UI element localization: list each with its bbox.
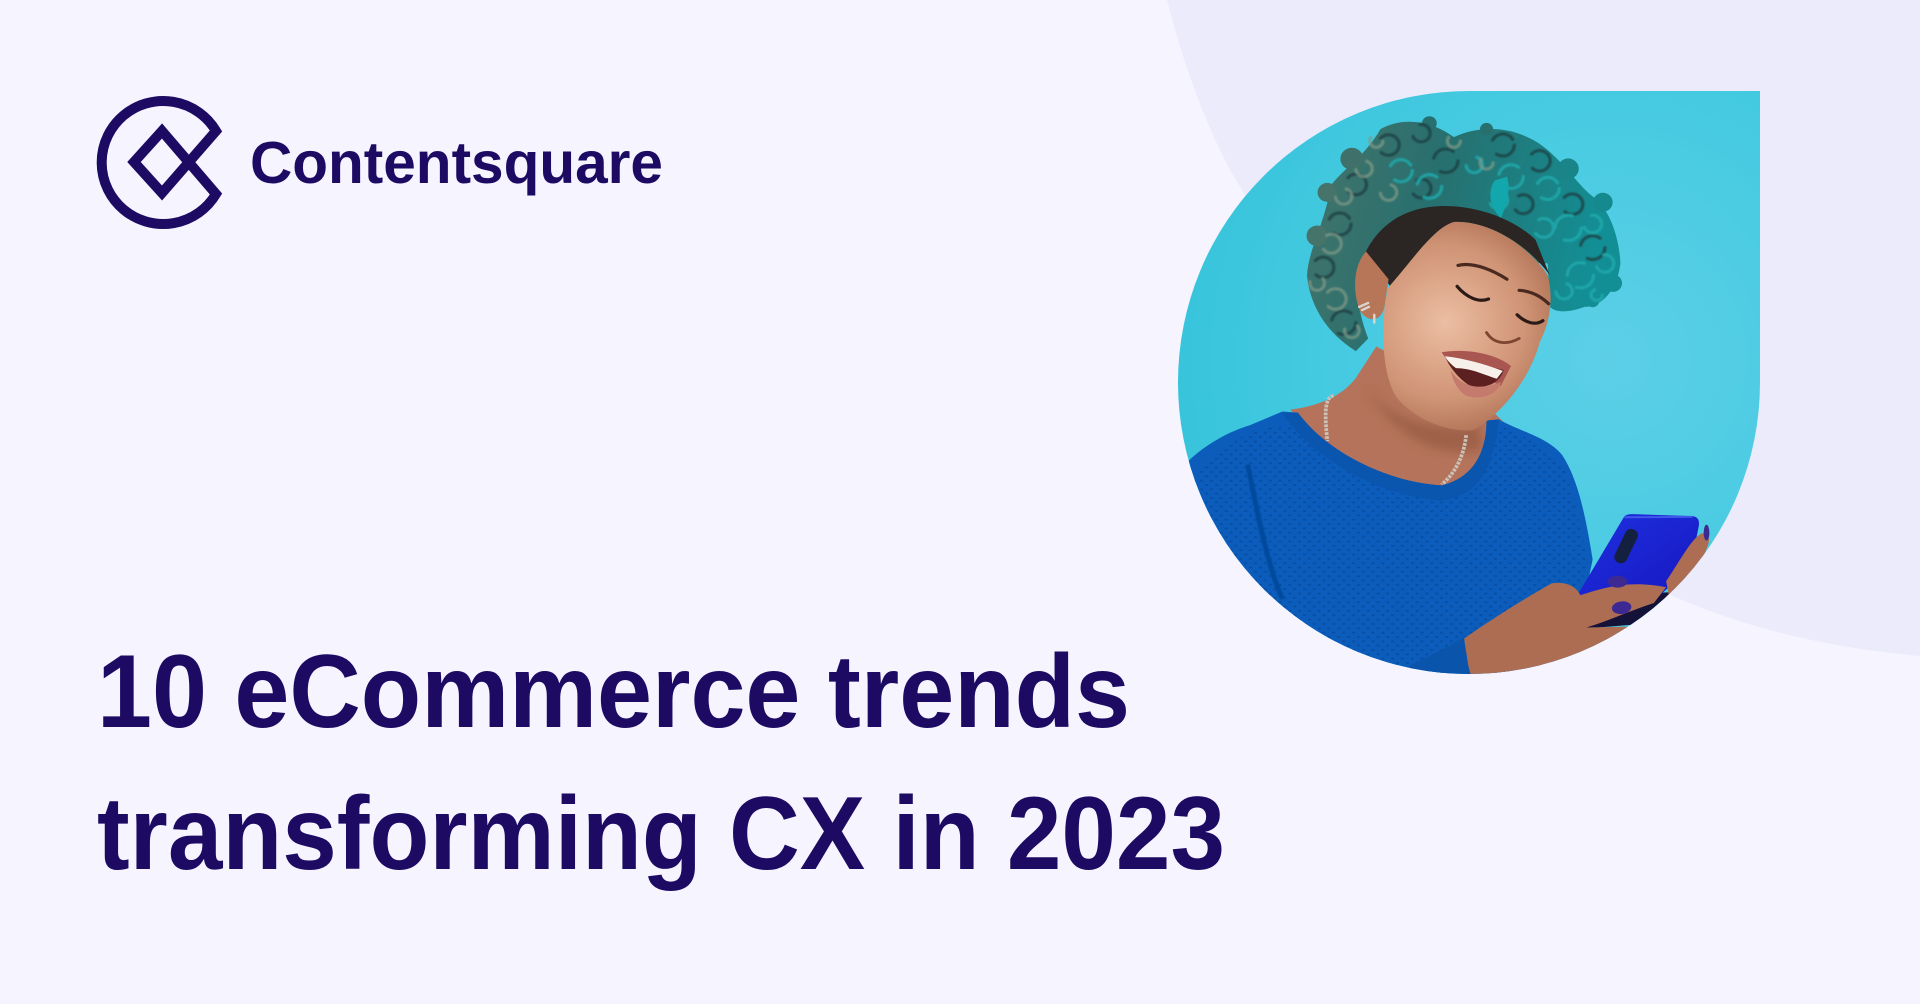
phone xyxy=(1576,514,1699,629)
face xyxy=(1383,222,1551,430)
neck and chest xyxy=(1291,346,1503,492)
sweater knit texture xyxy=(1197,425,1589,678)
hair bright curl xyxy=(1490,177,1509,218)
hair curls xyxy=(1310,124,1614,338)
sleeve cuff xyxy=(1409,637,1470,674)
eyes xyxy=(1457,286,1543,323)
sweater xyxy=(1188,412,1593,674)
neck shadow xyxy=(1381,406,1482,454)
lower lip xyxy=(1451,370,1501,397)
phone lower dark edge xyxy=(1586,592,1671,628)
upper lip xyxy=(1442,351,1511,386)
title line 1: 10 eCommerce trends xyxy=(97,634,1130,750)
earrings xyxy=(1359,303,1374,323)
title line 2: transforming CX in 2023 xyxy=(97,776,1225,892)
photo: smiling woman with phone in teardrop mask xyxy=(1178,91,1760,674)
sleeve shadow xyxy=(1248,465,1282,599)
nose shadow xyxy=(1487,333,1519,343)
logo icon xyxy=(102,101,216,224)
eyebrows xyxy=(1458,265,1549,304)
mouth interior xyxy=(1445,356,1504,387)
logo xyxy=(102,101,663,224)
hair mass xyxy=(1307,122,1620,351)
mouth xyxy=(1442,351,1511,397)
phone camera xyxy=(1614,528,1638,564)
ear xyxy=(1355,252,1389,319)
title xyxy=(97,634,1225,892)
shaved hair side xyxy=(1364,206,1550,287)
thumb xyxy=(1666,533,1709,594)
photo background xyxy=(1170,85,1770,685)
logo wordmark: Contentsquare xyxy=(250,130,663,196)
sweater neckline ribbing xyxy=(1282,413,1499,500)
nails xyxy=(1608,525,1709,615)
phone body xyxy=(1576,514,1699,597)
hair edge tufts xyxy=(1307,116,1622,307)
fingers and palm xyxy=(1464,583,1666,678)
background lavender shape xyxy=(1167,0,1920,656)
hand xyxy=(1464,525,1709,678)
teeth xyxy=(1445,356,1503,379)
necklace xyxy=(1326,396,1466,485)
phone edge highlight xyxy=(1624,516,1693,518)
